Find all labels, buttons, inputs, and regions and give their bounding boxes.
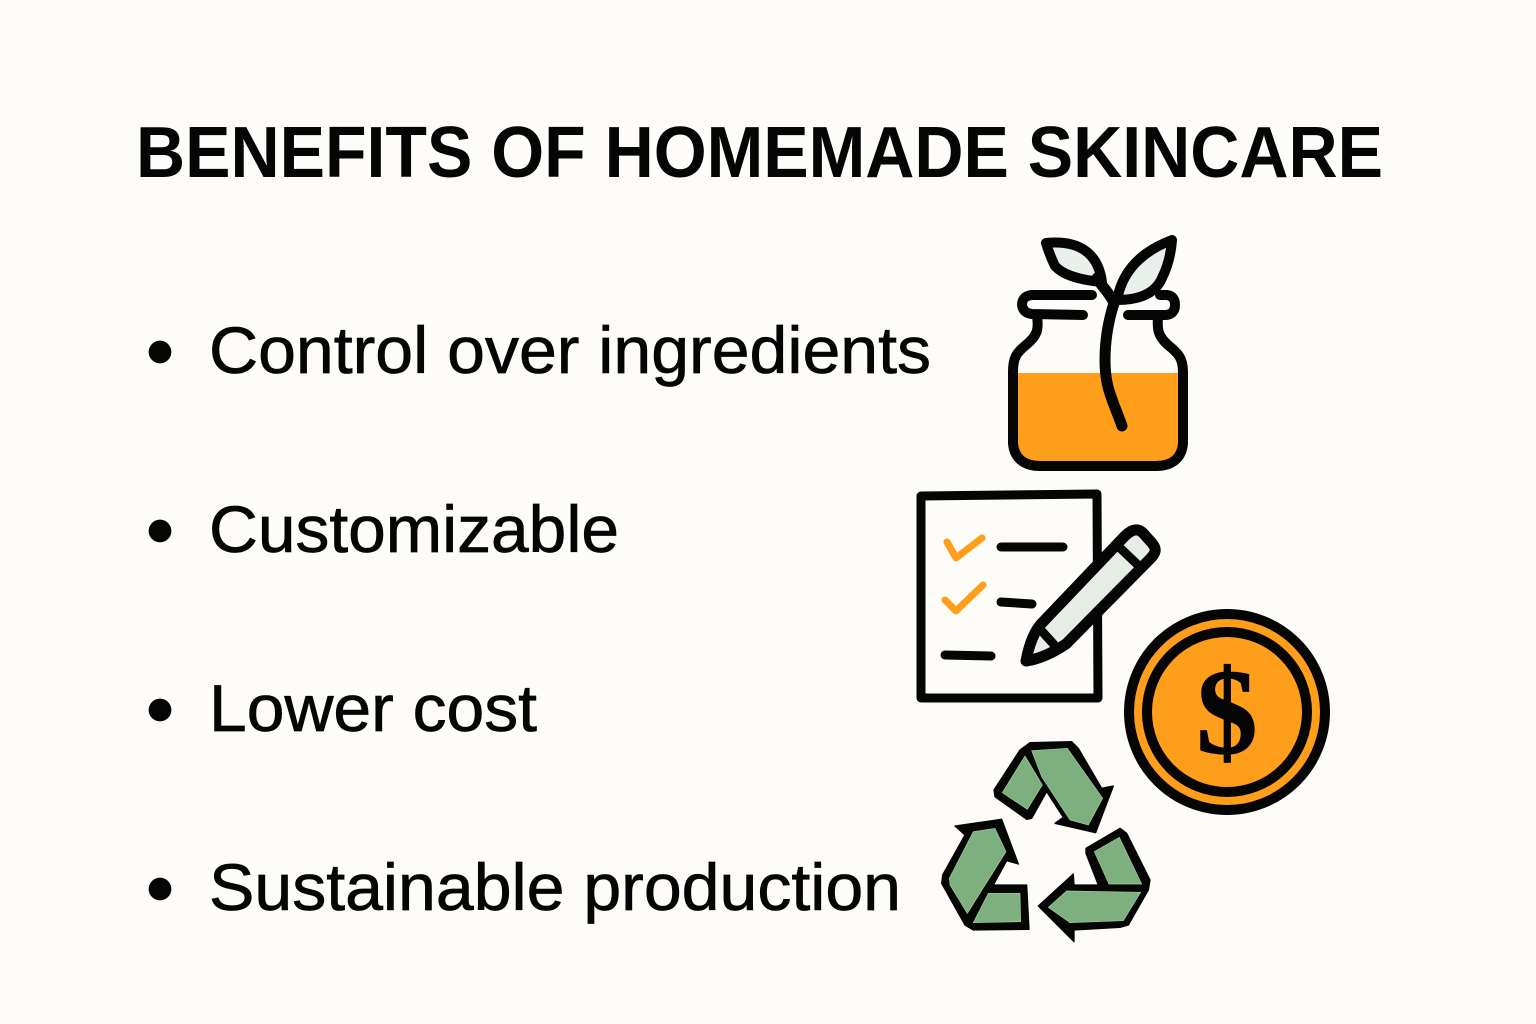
bullet item: customizable: Customizable bbox=[209, 492, 619, 566]
right arrow bbox=[1038, 828, 1150, 942]
checklist line 3 bbox=[945, 655, 991, 656]
title: BENEFITS OF HOMEMADE SKINCARE bbox=[136, 113, 1383, 193]
orange check 2 bbox=[945, 585, 983, 611]
bullet item: lower cost: Lower cost bbox=[209, 671, 537, 745]
icon: dollar coin bbox=[1129, 614, 1325, 810]
icon: dollar coin: $ bbox=[1196, 645, 1258, 780]
checklist line 2 bbox=[1001, 602, 1032, 604]
top arrow bbox=[994, 742, 1113, 833]
bullet item: control over ingredients: Control over ingredients bbox=[209, 313, 931, 387]
icon: jar with plant bbox=[1013, 240, 1183, 466]
icon: recycling arrows bbox=[942, 742, 1150, 942]
orange check 1 bbox=[947, 538, 982, 558]
bullet item: sustainable production: Sustainable production bbox=[209, 850, 901, 924]
left arrow bbox=[942, 819, 1029, 930]
checklist page bbox=[921, 494, 1098, 698]
pencil bbox=[1026, 530, 1155, 661]
benefits list bbox=[149, 313, 931, 924]
icon: checklist with pencil bbox=[921, 494, 1155, 698]
checklist line 1 bbox=[1001, 542, 1063, 552]
